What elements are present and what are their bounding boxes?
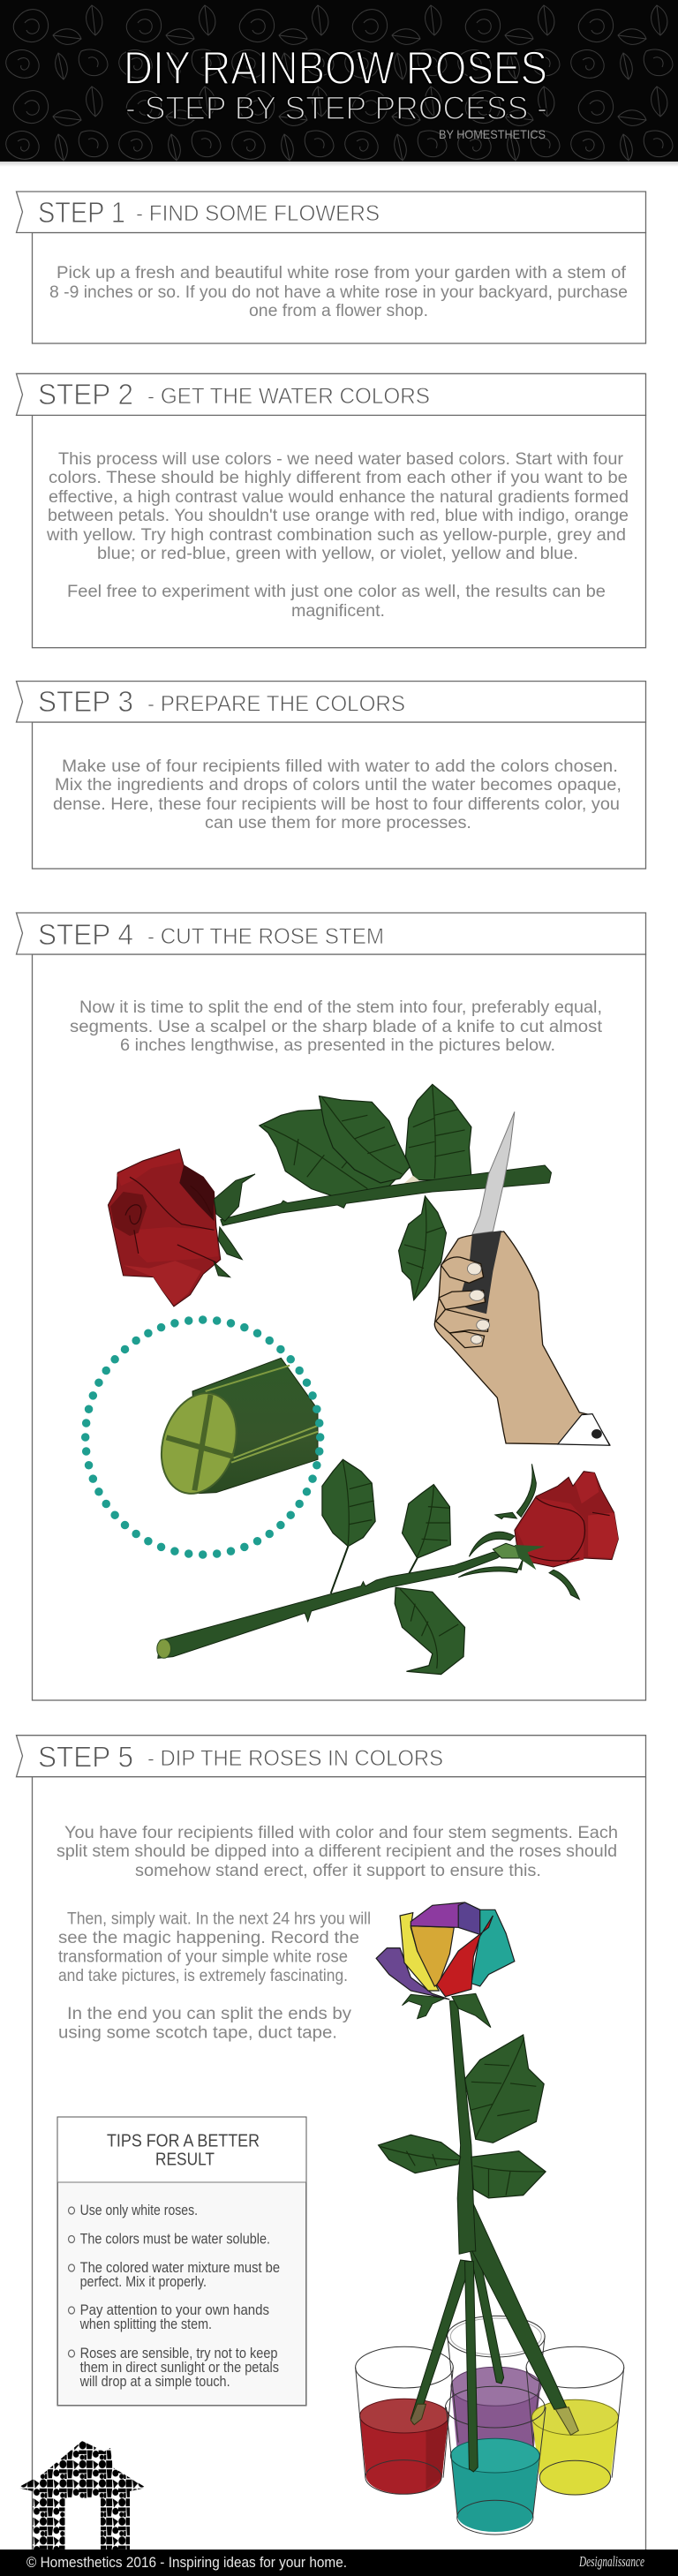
tips list: The colors must be water soluble. (80, 2230, 270, 2248)
tips heading (107, 2131, 260, 2170)
step 1 text: one from a flower shop. (249, 302, 428, 320)
step 5 intro text: split stem should be dipped into a different recipient and the roses should (56, 1842, 617, 1861)
step 3 text (53, 757, 622, 832)
yellow glass (526, 2346, 624, 2496)
step 5 left text: In the end you can split the ends by (67, 2005, 352, 2023)
illustration: red rose with cut stem (157, 1459, 618, 1675)
step 3 text: Make use of four recipients filled with water to add the colors chosen. (62, 757, 618, 776)
tips list: Roses are sensible, try not to keep (80, 2345, 277, 2361)
byline: BY HOMESTHETICS (439, 127, 546, 141)
tips list: perfect. Mix it properly. (80, 2273, 207, 2290)
step 1 heading: STEP 1 (38, 196, 125, 229)
fingers (436, 1257, 488, 1348)
step 3 text: can use them for more processes. (205, 814, 471, 832)
step 2 heading (38, 378, 430, 411)
leaves on stem (260, 1084, 471, 1300)
illustration: red rose with leaves, knife and hand (108, 1084, 610, 1445)
green tip over rose (515, 1545, 545, 1570)
step 4 heading: STEP 4 (38, 918, 133, 951)
fingernails (467, 1263, 489, 1344)
tips list: them in direct sunlight or the petals (80, 2359, 279, 2376)
step 5 heading: STEP 5 (38, 1741, 133, 1773)
step 1 heading: - FIND SOME FLOWERS (136, 201, 380, 226)
teal glass (445, 2386, 546, 2535)
step 5 heading: - DIP THE ROSES IN COLORS (147, 1746, 443, 1771)
step 2 text: magnificent. (291, 602, 385, 621)
step 2 text: This process will use colors - we need water based colors. Start with four (58, 450, 624, 469)
subtitle: - STEP BY STEP PROCESS - (125, 90, 547, 126)
step 5 left text: and take pictures, is extremely fascinating. (58, 1967, 348, 1985)
tips list: Pay attention to your own hands (80, 2301, 269, 2318)
step 5 intro text (56, 1824, 618, 1880)
step 5 left text: Then, simply wait. In the next 24 hrs you will (67, 1910, 371, 1928)
step 1 text (49, 264, 628, 320)
dotted circle (86, 1320, 320, 1555)
purple glass (447, 2316, 545, 2487)
rose head (108, 1149, 221, 1307)
sepals (214, 1174, 255, 1277)
panel: step 4 (16, 913, 646, 1700)
step 1 heading (38, 196, 380, 229)
knife (458, 1111, 515, 1314)
step 3 heading (38, 685, 405, 718)
step 5 left text: see the magic happening. Record the (58, 1929, 359, 1947)
step 2 text: Feel free to experiment with just one color as well, the results can be (67, 583, 606, 601)
icon: house made of small icons (18, 2441, 147, 2550)
panel: step 3 (16, 682, 646, 869)
step 1 text: Pick up a fresh and beautiful white rose from your garden with a stem of (56, 264, 627, 282)
calyx (493, 1543, 524, 1558)
step 2 heading: - GET THE WATER COLORS (147, 384, 430, 409)
step 4 text: 6 inches lengthwise, as presented in the pictures below. (120, 1036, 555, 1055)
footer (0, 2550, 678, 2576)
stem (221, 1165, 551, 1225)
step 3 heading: STEP 3 (38, 685, 133, 718)
copyright text: © Homesthetics 2016 - Inspiring ideas for your home. (26, 2554, 347, 2571)
step 2 text: between petals. You shouldn't use orange with red, blue with indigo, orange (48, 507, 629, 525)
illustration: four glasses of coloured water with split rose (356, 2204, 624, 2535)
tips list: when splitting the stem. (79, 2316, 212, 2332)
illustration: rainbow rose (376, 1902, 546, 2254)
step 5 left text (58, 1910, 371, 2043)
step 4 heading (38, 918, 384, 951)
shirt cuff (558, 1414, 610, 1445)
step 2 text: colors. These should be highly different from each other if you want to be (49, 469, 628, 487)
tips list: will drop at a simple touch. (79, 2373, 230, 2390)
tips list: Use only white roses. (80, 2202, 198, 2218)
hand (434, 1232, 610, 1445)
panel: step 1 (16, 192, 646, 343)
step 2 heading: STEP 2 (38, 378, 133, 411)
tips list (79, 2202, 280, 2390)
step 5 intro text: You have four recipients filled with color and four stem segments. Each (64, 1824, 618, 1842)
illustration: cut stem close-up (153, 1358, 318, 1497)
step 4 heading: - CUT THE ROSE STEM (147, 924, 384, 949)
front stem (465, 2262, 478, 2472)
sepals (458, 1464, 579, 1600)
step 4 text: Now it is time to split the end of the stem into four, preferably equal, (79, 998, 602, 1017)
rainbow petals (376, 1902, 515, 2000)
step 3 text: dense. Here, these four recipients will be host to four differents color, you (53, 795, 620, 814)
step 3 heading: - PREPARE THE COLORS (147, 692, 405, 717)
step 5 intro text: somehow stand erect, offer it support to ensure this. (135, 1862, 541, 1880)
designer logo: Designalissance (578, 2553, 644, 2570)
step 5 left text: using some scotch tape, duct tape. (58, 2023, 337, 2043)
cut end (157, 1639, 170, 1658)
step 5 heading (38, 1741, 443, 1773)
tips list: The colored water mixture must be (80, 2259, 280, 2276)
step 1 text: 8 -9 inches or so. If you do not have a white rose in your backyard, purchase (49, 283, 628, 302)
step 2 text (46, 450, 629, 621)
stem leaves (379, 2035, 546, 2198)
step 3 text: Mix the ingredients and drops of colors until the water becomes opaque, (55, 776, 622, 795)
tips heading: TIPS FOR A BETTER (107, 2131, 260, 2150)
main stem (449, 2001, 476, 2254)
step 5 left text: transformation of your simple white rose (58, 1947, 348, 1967)
red glass (356, 2346, 453, 2494)
tips bullets (69, 2207, 74, 2357)
leaves (322, 1459, 465, 1675)
step 4 text: segments. Use a scalpel or the sharp blade of a knife to cut almost (70, 1018, 603, 1036)
step 2 text: with yellow. Try high contrast combination such as yellow-purple, grey and (46, 526, 626, 545)
tips heading: RESULT (155, 2150, 215, 2170)
stem (158, 1552, 506, 1658)
cut end with cross (153, 1390, 245, 1497)
header banner (0, 0, 678, 167)
split stems (411, 2204, 578, 2435)
rose head (515, 1472, 618, 1567)
title: DIY RAINBOW ROSES (124, 42, 547, 94)
panel: step 5 (16, 1736, 646, 2551)
tips box (57, 2117, 306, 2406)
step 2 text: effective, a high contrast value would enhance the natural gradients formed (49, 488, 629, 507)
sepals (403, 1993, 491, 2028)
step 2 text: blue; or red-blue, green with yellow, or violet, yellow and blue. (97, 545, 578, 563)
step 4 text (70, 998, 603, 1055)
panel: step 2 (16, 373, 646, 648)
